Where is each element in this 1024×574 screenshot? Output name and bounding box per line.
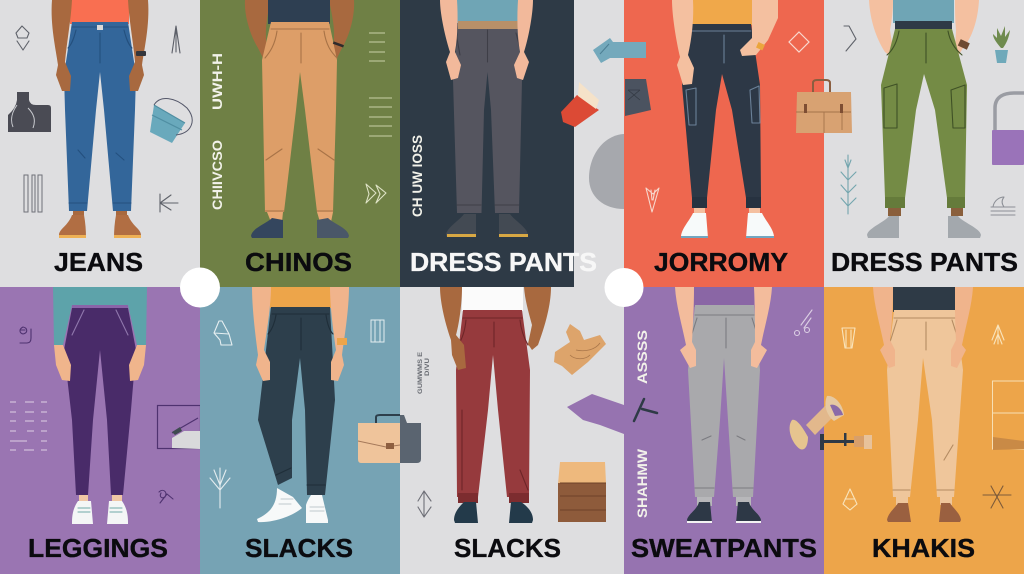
icon: short lines xyxy=(369,33,385,61)
figure: sweatpants xyxy=(675,287,772,523)
icon: striped box xyxy=(371,320,384,342)
label: sweatpants: SWEATPANTS xyxy=(631,533,817,563)
icon: dumbbell xyxy=(790,396,844,449)
panel: chinos xyxy=(200,0,400,287)
icon: framed tool xyxy=(158,406,200,449)
vertical text: chinos bottom: CHIIVCSO xyxy=(209,140,225,210)
icon: dark T tool xyxy=(634,399,657,421)
icon: small squiggle xyxy=(159,490,173,503)
panel: dress pants green xyxy=(824,0,1024,287)
vertical text: dress pants: CH UW IOSS xyxy=(409,135,425,217)
icon: long lines xyxy=(369,98,392,136)
figure: joggers xyxy=(672,0,778,238)
small text: slacks: D/VU xyxy=(424,358,431,376)
figure: slacks red xyxy=(440,287,551,523)
figure: slacks blue xyxy=(252,287,349,523)
icon: tan bag xyxy=(796,80,852,133)
icon: left arrow xyxy=(160,194,178,212)
icon: bare tree xyxy=(210,468,230,508)
vertical text: sweatpants top: ASSSS xyxy=(634,330,650,384)
icon: bucket xyxy=(150,99,192,143)
icon: briefcase xyxy=(358,415,421,463)
icon: stacked clothes xyxy=(558,462,606,522)
label: chinos: CHINOS xyxy=(245,247,352,277)
label: leggings: LEGGINGS xyxy=(28,533,168,563)
icon: gray hat xyxy=(589,134,624,209)
label: jeans: JEANS xyxy=(54,247,143,277)
panel: jorrony xyxy=(624,0,824,287)
connector circle: left xyxy=(180,268,220,308)
small text: slacks: GUMWMS E xyxy=(417,351,424,394)
icon: trapezoid xyxy=(842,328,855,348)
icon: dark pocket xyxy=(625,79,651,116)
icon: purple padlock xyxy=(992,93,1024,165)
figure: cargo pants xyxy=(867,0,981,238)
vertical text: sweatpants bottom: SHAHMW xyxy=(634,448,650,518)
icon: diamond and chevron xyxy=(16,26,29,50)
icon: small chain xyxy=(794,310,812,336)
icon: shelf frame xyxy=(992,381,1024,450)
icon: fern xyxy=(841,155,856,214)
panel: gray strip xyxy=(574,0,624,287)
icon: dark vessel xyxy=(8,92,51,132)
figure: chinos xyxy=(245,0,354,238)
panel: khakis xyxy=(824,287,1024,574)
label: dress pants white: DRESS PANTS xyxy=(410,247,597,277)
icon: diamond xyxy=(789,32,809,52)
figure: khakis xyxy=(873,287,973,522)
panel: jeans xyxy=(0,0,200,287)
vertical text: chinos top: UWH-H xyxy=(209,53,225,110)
label: jorrony: JORROMY xyxy=(654,247,788,277)
icon: potted plant xyxy=(993,26,1010,63)
icon: arrows xyxy=(418,491,431,517)
icon: asterisk xyxy=(983,486,1011,508)
small text: slacks xyxy=(417,351,431,394)
icon: fin xyxy=(991,197,1015,215)
icon: blue strap xyxy=(593,38,646,63)
panel: slacks gray xyxy=(400,287,624,574)
panel: dress pants dark xyxy=(400,0,574,287)
panel: sweatpants xyxy=(624,287,824,574)
connector circle: right xyxy=(604,268,644,307)
label: slacks blue: SLACKS xyxy=(245,533,353,563)
label: slacks gray: SLACKS xyxy=(454,533,561,563)
icon: barbell xyxy=(820,433,872,450)
figure: dress pants dark xyxy=(440,0,533,237)
figure: jeans xyxy=(52,0,148,238)
figure: leggings xyxy=(53,287,147,524)
icon: zigzag xyxy=(844,26,856,51)
icon: purple garment xyxy=(567,394,624,434)
label: khakis: KHAKIS xyxy=(872,533,975,563)
icon: three bars xyxy=(24,175,42,212)
panel: slacks blue xyxy=(200,287,421,574)
icon: gray case xyxy=(400,415,421,463)
icon: up arrow xyxy=(172,26,180,53)
label: dress pants green: DRESS PANTS xyxy=(831,247,1018,277)
icon: diamond outline xyxy=(843,489,857,510)
panel: leggings xyxy=(0,287,200,574)
icon: chevron up xyxy=(992,325,1004,344)
icon: small glyph xyxy=(20,327,31,343)
icon: red cup xyxy=(561,82,599,127)
icon: tan shoe xyxy=(554,324,606,375)
icon: polygon outline xyxy=(214,321,232,345)
text lines xyxy=(10,402,47,450)
icon: double chevron xyxy=(366,184,386,203)
icon: down arrow xyxy=(646,188,659,212)
